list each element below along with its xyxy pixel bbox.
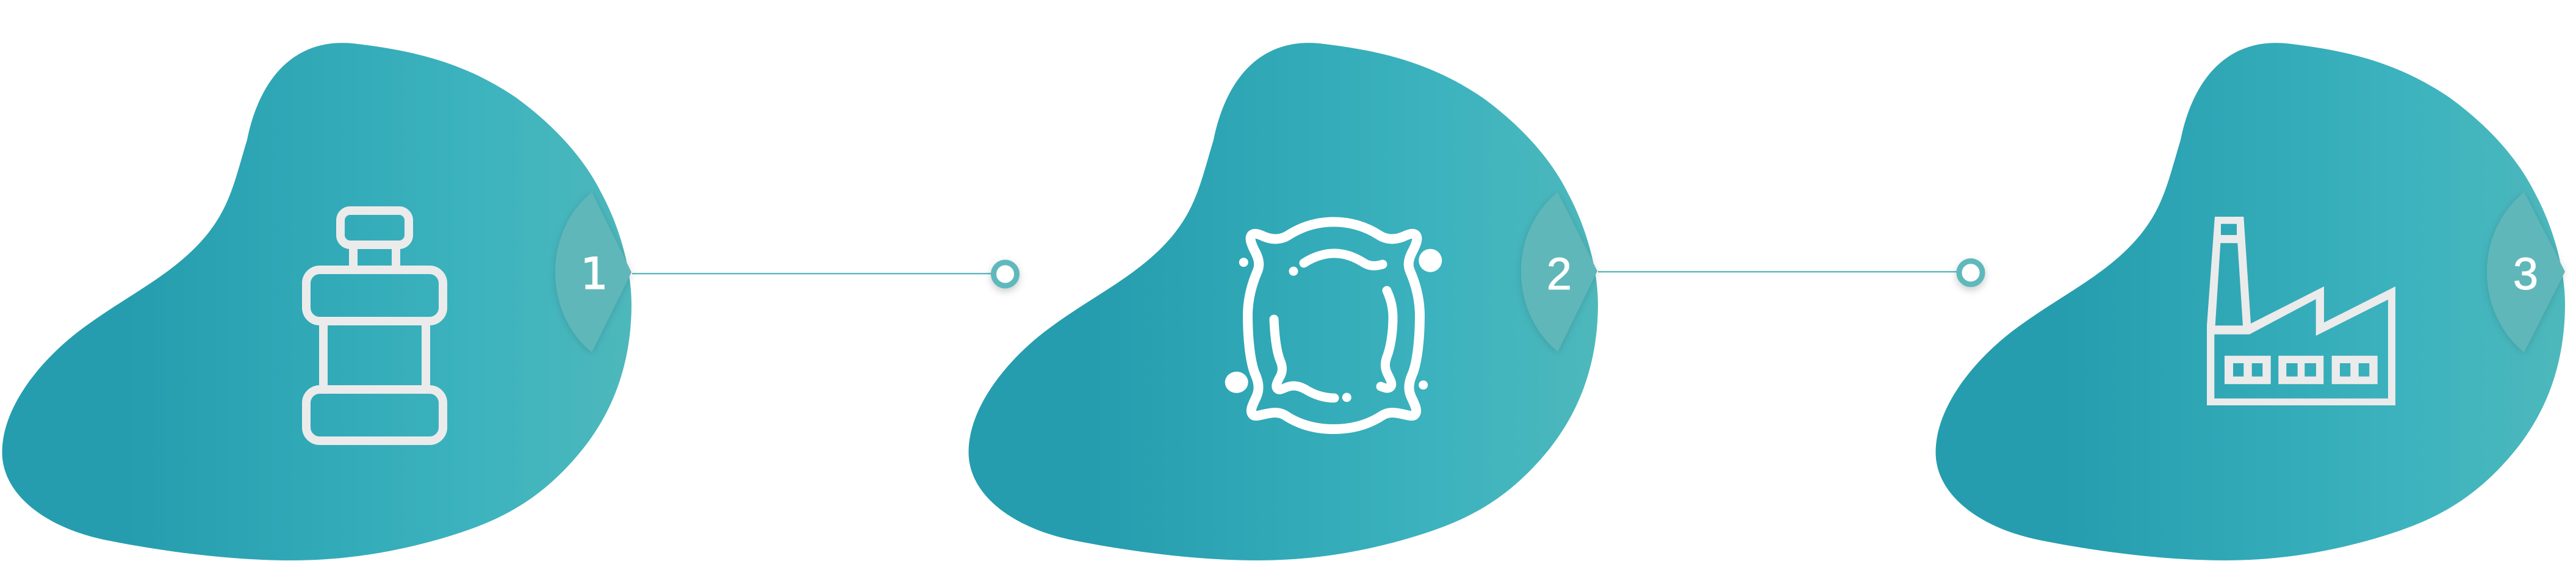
icon: factory xyxy=(2207,217,2395,405)
badge 1 xyxy=(555,192,631,352)
connector line 1 xyxy=(632,273,992,274)
badge 2 xyxy=(1521,192,1597,352)
icon: bottle xyxy=(306,211,443,441)
connector node 2 xyxy=(1959,261,1982,284)
badge 2: 2 xyxy=(1547,248,1572,299)
panel: step 3 xyxy=(1935,43,2565,560)
badge 3: 3 xyxy=(2513,248,2538,299)
connector node 1 xyxy=(993,262,1016,286)
blob 3 xyxy=(1935,43,2565,560)
blob 2 xyxy=(969,43,1598,560)
blob 1 xyxy=(2,43,631,560)
panel: step 2 xyxy=(969,43,1598,560)
panel: step 1 xyxy=(2,43,631,560)
badge 3 xyxy=(2487,192,2565,352)
connector line 2 xyxy=(1598,271,1959,272)
icon: sack xyxy=(1225,222,1442,429)
badge 1: 1 xyxy=(580,248,608,299)
